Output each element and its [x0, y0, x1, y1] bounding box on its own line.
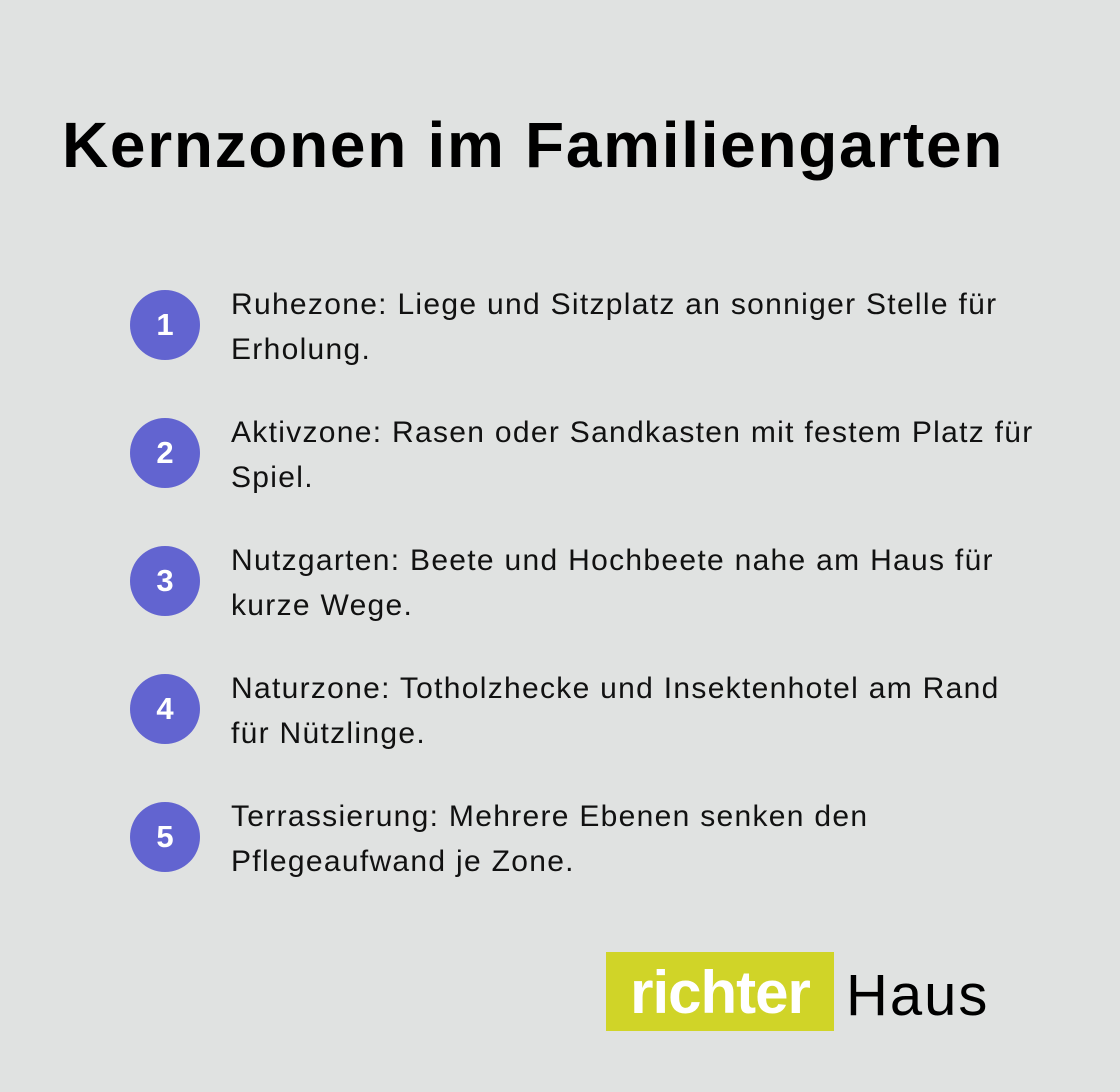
item 2: Spiel. — [231, 461, 314, 494]
item 4: Naturzone: Totholzhecke und Insektenhotel am Rand — [231, 672, 1000, 705]
logo: richter — [630, 959, 810, 1026]
item 4: für Nützlinge. — [231, 717, 426, 750]
item 2: 2 — [156, 435, 174, 470]
logo — [606, 952, 989, 1031]
item 5 — [130, 800, 868, 878]
item 5: 5 — [156, 819, 174, 854]
item 1: Ruhezone: Liege und Sitzplatz an sonniger Stelle für — [231, 288, 997, 321]
item 1 — [130, 288, 997, 366]
item 5: Pflegeaufwand je Zone. — [231, 845, 575, 878]
item 3: kurze Wege. — [231, 589, 413, 622]
item 3 — [130, 544, 994, 622]
item 1: Erholung. — [231, 333, 371, 366]
item 5: Terrassierung: Mehrere Ebenen senken den — [231, 800, 868, 833]
item 3: Nutzgarten: Beete und Hochbeete nahe am Haus für — [231, 544, 994, 577]
item 3: 3 — [156, 563, 174, 598]
item 4: 4 — [156, 691, 174, 726]
item 4 — [130, 672, 1000, 750]
item 1: 1 — [156, 307, 174, 342]
logo: Haus — [846, 963, 989, 1028]
item 2: Aktivzone: Rasen oder Sandkasten mit festem Platz für — [231, 416, 1034, 449]
title: Kernzonen im Familiengarten — [62, 109, 1004, 181]
item 2 — [130, 416, 1034, 494]
